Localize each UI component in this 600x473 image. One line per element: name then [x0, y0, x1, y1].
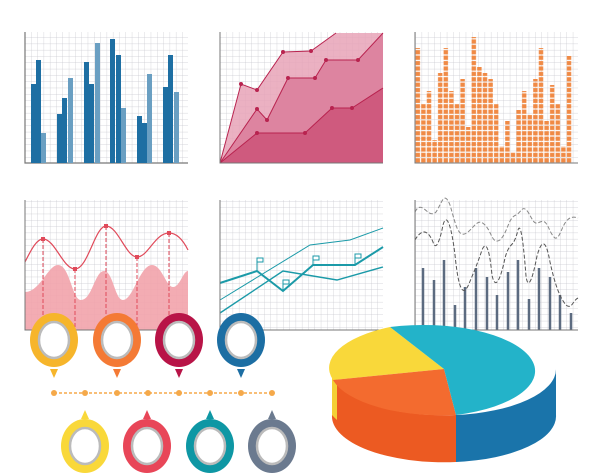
icon: pin yellow [61, 410, 109, 473]
icon: pin blue [217, 313, 265, 378]
icon: pin crimson [155, 313, 203, 378]
chart: blue bar chart [25, 32, 188, 163]
icon: pin orange [93, 313, 141, 378]
chart: 3D pie [329, 325, 556, 462]
chart: pink wave [25, 200, 188, 330]
icon: pin teal [186, 410, 234, 473]
icon: pin red [123, 410, 171, 473]
chart: orange square columns [415, 32, 578, 163]
timeline: dotted line [51, 390, 275, 396]
chart: gray bars with dashed curves [415, 198, 578, 330]
chart: teal lines [220, 200, 383, 330]
icon: pin gray [248, 410, 296, 473]
chart: pink stacked area [220, 32, 383, 163]
icon: flags [257, 254, 361, 291]
icon: pin yellow-orange [30, 313, 78, 378]
